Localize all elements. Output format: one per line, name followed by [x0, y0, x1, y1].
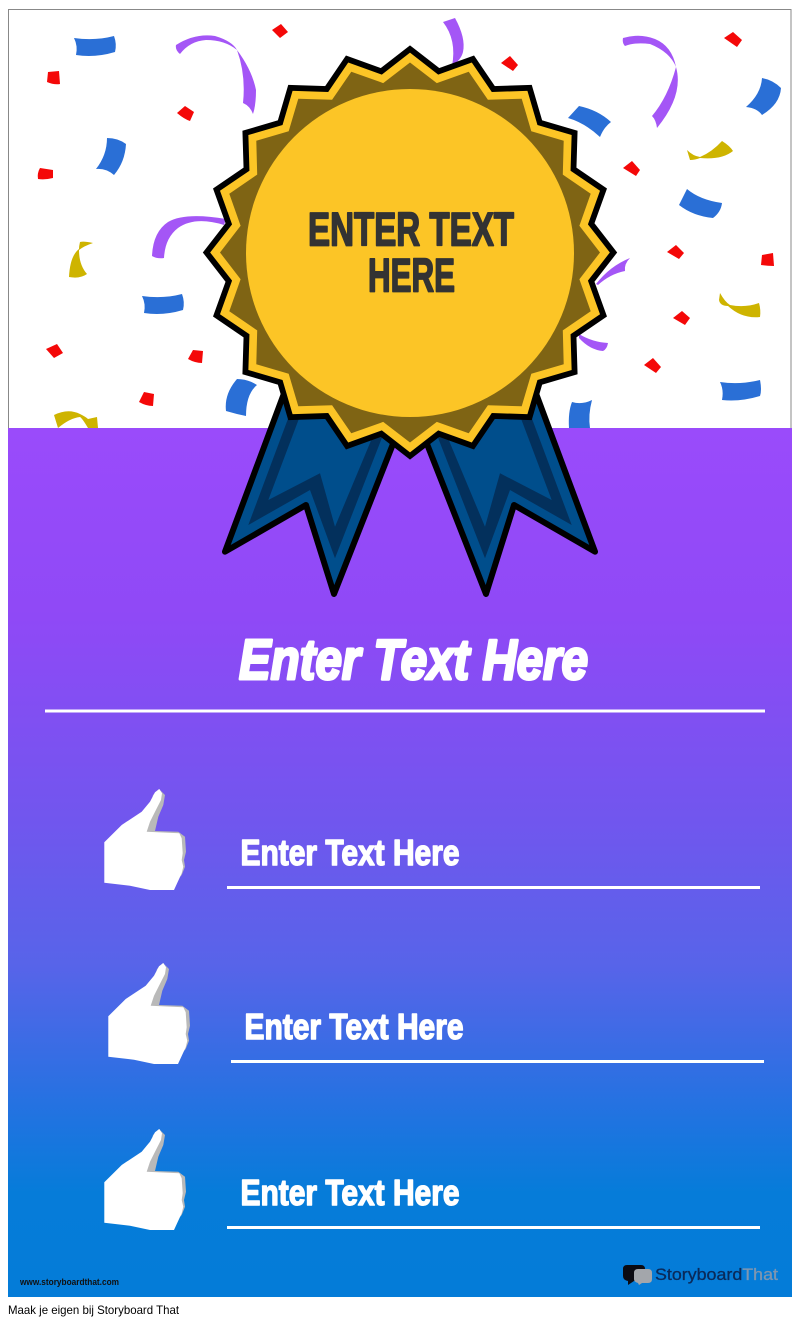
heading underline [45, 710, 765, 712]
gold streamers [54, 141, 760, 428]
icon: thumbs up [104, 1129, 186, 1230]
main heading: Enter Text Here [239, 628, 588, 692]
left ribbon [225, 372, 404, 594]
row text: Enter Text Here [240, 1172, 460, 1213]
row underline [231, 1060, 764, 1063]
icon: speech bubbles [623, 1265, 652, 1285]
right ribbon [416, 372, 595, 594]
list row 2 [108, 963, 764, 1064]
logo wordmark: StoryboardThat [655, 1265, 778, 1284]
gradient panel [8, 428, 792, 1297]
row text: Enter Text Here [240, 832, 460, 873]
award badge [206, 49, 614, 594]
blue confetti [74, 36, 781, 428]
red confetti [38, 24, 774, 406]
badge text: ENTER TEXT [308, 202, 514, 256]
website url: www.storyboardthat.com [19, 1277, 119, 1287]
row text: Enter Text Here [244, 1006, 464, 1047]
confetti [38, 18, 781, 428]
icon: thumbs up [108, 963, 190, 1064]
rosette [206, 49, 614, 456]
footer credit: Maak je eigen bij Storyboard That [8, 1303, 180, 1317]
row underline [227, 886, 760, 889]
purple streamers [152, 18, 678, 351]
icon: thumbs up [104, 789, 186, 890]
badge text: HERE [368, 248, 455, 302]
list row 3 [104, 1129, 760, 1230]
row underline [227, 1226, 760, 1229]
list row 1 [104, 789, 760, 890]
storyboard that logo [623, 1265, 778, 1285]
badge text [308, 202, 514, 302]
